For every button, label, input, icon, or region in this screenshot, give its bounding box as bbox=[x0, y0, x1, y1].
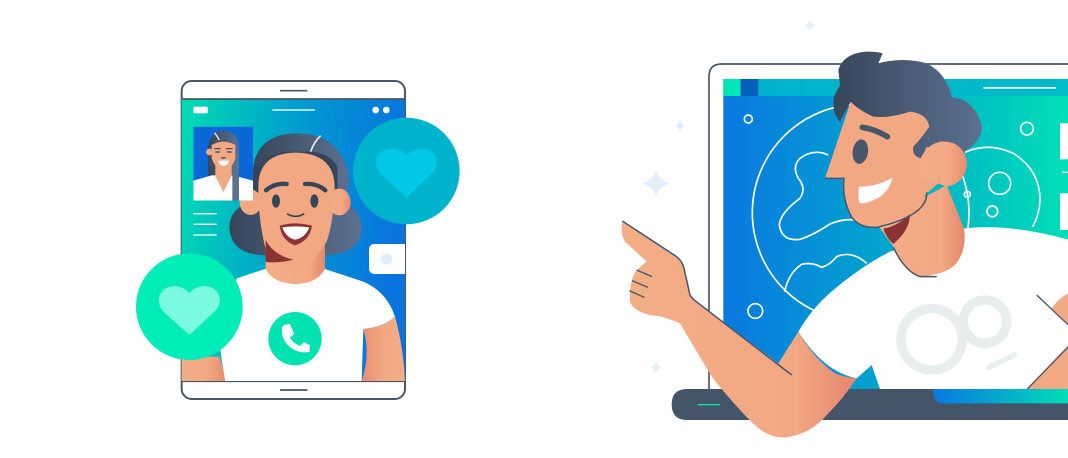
screen title bar bbox=[758, 79, 1068, 96]
illustration canvas bbox=[136, 20, 1068, 438]
man: pointing arm and hand bbox=[622, 222, 857, 437]
thumbnail self view bbox=[193, 127, 253, 201]
screen bubbles bbox=[744, 115, 1040, 318]
green heart badge bbox=[136, 253, 243, 360]
thumbnail neck bbox=[215, 165, 232, 192]
screen top and bottom rules bbox=[182, 99, 405, 381]
man: neck bbox=[877, 185, 965, 277]
shirt phone badge bbox=[268, 312, 322, 365]
tablet screen bbox=[182, 99, 405, 381]
tablet frame bbox=[182, 81, 405, 399]
hair highlight bbox=[311, 136, 321, 152]
thumbnail hair streak bbox=[215, 133, 219, 140]
thumbnail eyes and brows bbox=[214, 149, 233, 158]
title bar line bbox=[983, 87, 1056, 89]
man: right hand bbox=[1027, 293, 1068, 389]
thumbnail smile bbox=[218, 161, 229, 166]
globe continent lower bbox=[785, 254, 867, 292]
thumbnail hair back bbox=[208, 130, 239, 176]
thumbnail face bbox=[212, 142, 236, 166]
woman: shirt bbox=[218, 269, 395, 381]
laptop base bbox=[672, 389, 1068, 420]
woman: nose bbox=[288, 214, 304, 216]
woman: ears bbox=[240, 189, 351, 215]
neck shadow bbox=[883, 214, 910, 244]
tab dot bbox=[381, 253, 392, 265]
base gradient strip bbox=[933, 389, 1068, 403]
woman: back hair bbox=[229, 202, 362, 255]
laptop lid outline bbox=[709, 64, 1068, 390]
hair inner shade bbox=[253, 152, 337, 189]
man: eyebrow bbox=[862, 127, 887, 137]
globe continent upper bbox=[779, 152, 855, 240]
screen status icons bbox=[193, 107, 390, 113]
woman: teeth bbox=[282, 226, 309, 240]
base indicator bbox=[698, 404, 720, 405]
man: hair bbox=[833, 52, 982, 160]
white side tab bbox=[369, 244, 405, 274]
thumbnail ear bbox=[206, 149, 213, 155]
globe outline bbox=[752, 104, 969, 321]
hand outlines bbox=[1027, 295, 1068, 389]
jaw outline bbox=[825, 178, 927, 227]
laptop screen bbox=[723, 79, 1068, 390]
left illustration: woman on a video call bbox=[136, 81, 460, 399]
woman: neck bbox=[266, 237, 325, 284]
woman: eyes bbox=[272, 194, 318, 208]
right side panels bbox=[1060, 123, 1068, 230]
woman: right arm bbox=[362, 317, 405, 381]
neck outline bbox=[893, 247, 937, 277]
woman: eyebrows bbox=[266, 184, 325, 190]
woman: face bbox=[258, 153, 335, 267]
menu lines bbox=[193, 214, 217, 235]
arm outline bbox=[622, 221, 792, 375]
woman: top hair bbox=[253, 133, 349, 210]
woman: left arm bbox=[182, 357, 225, 381]
finger lines bbox=[629, 270, 652, 297]
neck shadow bbox=[266, 240, 293, 262]
man: ear bbox=[920, 142, 967, 187]
shirt logo bbox=[901, 300, 1014, 370]
teal heart badge bbox=[353, 118, 460, 224]
tablet speakers bbox=[280, 91, 307, 390]
thumbnail long hair strand bbox=[232, 162, 239, 200]
woman: mouth bbox=[280, 223, 312, 245]
right illustration: man pointing from a laptop bbox=[622, 20, 1068, 437]
sparkles bbox=[642, 20, 816, 374]
man: eye bbox=[851, 138, 870, 165]
man: face bbox=[825, 102, 950, 227]
phone icon bbox=[282, 324, 310, 352]
teal heart bbox=[376, 149, 437, 197]
thumbnail shirt bbox=[193, 175, 253, 201]
green heart bbox=[159, 286, 220, 335]
man: shirt bbox=[798, 227, 1068, 389]
man: smile bbox=[858, 178, 892, 203]
thumbnail background bbox=[193, 127, 253, 201]
title bar tabs bbox=[723, 79, 758, 96]
